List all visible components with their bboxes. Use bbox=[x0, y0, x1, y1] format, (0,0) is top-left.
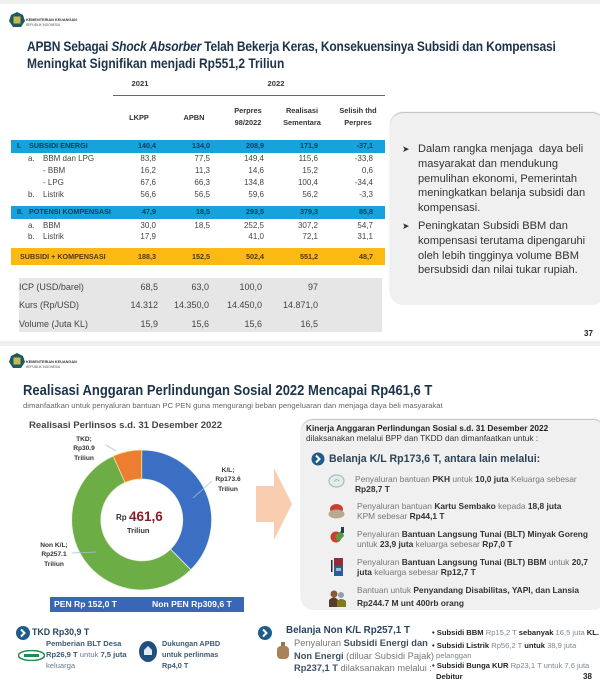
row: listrik: 56,6 bbox=[140, 190, 156, 199]
row: BBM dan LPG: a. bbox=[28, 154, 35, 163]
chart heading: Realisasi Perlinsos s.d. 31 Desember 2022 bbox=[29, 420, 222, 431]
item: dukungan APBD: Dukungan APBD bbox=[162, 639, 220, 648]
icon: chevron bullet bbox=[258, 626, 272, 640]
row: potensi kompensasi: II. bbox=[17, 207, 23, 216]
title: slide 1: APBN Sebagai Shock Absorber Telah Bekerja Keras, Konsekuensinya Subsidi dan Kompensasi bbox=[27, 38, 556, 54]
row: LPG: 66,3 bbox=[194, 178, 210, 187]
donut label: K/L: K/L; bbox=[222, 467, 234, 474]
item: PKH bbox=[355, 474, 577, 494]
row: BBM dan LPG: 115,6 bbox=[299, 154, 318, 163]
PEN bar: PEN Rp 152,0 T bbox=[54, 599, 117, 609]
row: BBM dan LPG: 83,8 bbox=[140, 154, 156, 163]
row: BBM dan LPG: BBM dan LPG bbox=[43, 154, 94, 163]
icon: dukungan APBD bbox=[139, 641, 157, 662]
row: kompensasi listrik: b. bbox=[28, 232, 35, 241]
icon: chevron bullet bbox=[16, 626, 30, 640]
row: kompensasi listrik: 17,9 bbox=[140, 232, 156, 241]
description bbox=[294, 637, 434, 674]
bullet 2: ➤ bbox=[402, 221, 410, 231]
row: BBM dan LPG: -33,8 bbox=[355, 154, 373, 163]
row: kompensasi listrik: 41,0 bbox=[248, 232, 264, 241]
icon: minyak goreng bbox=[330, 527, 344, 542]
list of subsidies: • Subsidi BBM Rp15,2 T sebanyak 16,5 juta KL. bbox=[432, 628, 599, 637]
donut label: Non K/L: Rp257.1 bbox=[41, 551, 67, 558]
column headers: Perpres bbox=[344, 118, 372, 127]
row: LPG bbox=[43, 178, 373, 187]
row: kompensasi BBM: 252,5 bbox=[244, 221, 264, 230]
row: listrik bbox=[28, 190, 373, 199]
description: Non Energi (diluar Subsidi Pajak) bbox=[294, 650, 434, 660]
panel: explanation bbox=[390, 113, 600, 305]
item: dukungan APBD bbox=[162, 639, 220, 670]
row: kompensasi listrik: Listrik bbox=[43, 232, 64, 241]
item: BBM bbox=[356, 557, 588, 577]
donut label: TKD: Triliun bbox=[74, 455, 94, 462]
row: subsidi + kompensasi bbox=[11, 248, 385, 265]
row: LPG: 67,6 bbox=[140, 178, 156, 187]
row: BBM: - BBM bbox=[43, 166, 65, 175]
bullet 2: kompensasi terutama dipengaruhi bbox=[418, 235, 585, 247]
item: disabilitas bbox=[357, 585, 580, 608]
item: BLT desa: Pemberian BLT Desa bbox=[46, 639, 121, 648]
row: volume: 15,6 bbox=[244, 319, 262, 329]
bullet 1: masyarakat dan mendukung bbox=[418, 158, 558, 170]
bullet 1: ➤ bbox=[402, 144, 410, 154]
row: kompensasi listrik: 72,1 bbox=[302, 232, 318, 241]
item: minyak goreng: Penyaluran Bantuan Langsung Tunai (BLT) Minyak Goreng bbox=[357, 529, 588, 539]
row: kurs bbox=[19, 300, 318, 310]
page number 38: 38 bbox=[583, 672, 592, 681]
row: volume: 16,5 bbox=[300, 319, 318, 329]
bullet 2: oleh lebih tingginya volume BBM bbox=[418, 250, 579, 262]
row: kompensasi BBM: 307,2 bbox=[298, 221, 318, 230]
item: minyak goreng: untuk 23,9 juta keluarga sebesar Rp7,0 T bbox=[357, 539, 513, 549]
list of subsidies bbox=[432, 627, 600, 683]
row: ICP: 100,0 bbox=[239, 282, 262, 292]
description: Penyaluran Subsidi Energi dan bbox=[294, 638, 428, 648]
row: potensi kompensasi bbox=[11, 206, 385, 219]
non K/L heading: Belanja Non K/L Rp257,1 T bbox=[286, 625, 410, 636]
row: listrik: Listrik bbox=[43, 190, 64, 199]
PEN bar bbox=[50, 597, 244, 612]
title: slide 1: Meningkat Signifikan menjadi Rp551,2 Triliun bbox=[27, 55, 284, 71]
row: BBM dan LPG: 77,5 bbox=[194, 154, 210, 163]
column headers: Sementara bbox=[283, 118, 321, 127]
TKD heading: TKD Rp30,9 T bbox=[32, 627, 89, 637]
row: potensi kompensasi: 47,9 bbox=[142, 207, 156, 216]
item: PKH: Penyaluran bantuan PKH untuk 10,0 juta Keluarga sebesar bbox=[355, 474, 577, 484]
logo: ministry of finance, slide 2 bbox=[9, 353, 77, 369]
row: subsidi energi bbox=[11, 140, 385, 153]
row: ICP: 97 bbox=[308, 282, 318, 292]
list of subsidies: Debitur bbox=[436, 672, 463, 681]
bullet 1: Dalam rangka menjaga daya beli bbox=[418, 143, 583, 155]
row: kompensasi BBM: 18,5 bbox=[194, 221, 210, 230]
list of subsidies: • Subsidi Bunga KUR Rp23,1 T untuk 7,6 juta bbox=[432, 661, 589, 670]
item: dukungan APBD: Rp4,0 T bbox=[162, 661, 188, 670]
PEN bar: Non PEN Rp309,6 T bbox=[152, 599, 232, 609]
page number 37: 37 bbox=[584, 329, 593, 338]
panel: kinerja anggaran bbox=[301, 420, 600, 610]
column headers: APBN bbox=[184, 113, 204, 122]
bullet 1 bbox=[402, 143, 585, 214]
row: listrik: 59,6 bbox=[248, 190, 264, 199]
donut label: K/L: Rp173.6 bbox=[215, 476, 241, 483]
item: BLT desa: Rp26,9 T untuk 7,5 juta bbox=[46, 650, 127, 659]
row: volume: 15,6 bbox=[191, 319, 209, 329]
row: listrik: 56,5 bbox=[194, 190, 210, 199]
row: potensi kompensasi: 379,3 bbox=[300, 207, 318, 216]
list of subsidies: pelanggan bbox=[436, 651, 471, 660]
row: BBM bbox=[43, 166, 373, 175]
logo: ministry of finance, slide 2: KEMENTERIAN KEUANGAN bbox=[26, 360, 77, 364]
row: subsidi energi: SUBSIDI ENERGI bbox=[29, 141, 88, 150]
row: potensi kompensasi: 85,8 bbox=[359, 207, 373, 216]
panel subheading: dilaksanakan melalui BPP dan TKDD dan dimanfaatkan untuk : bbox=[306, 433, 538, 443]
item: BBM: Penyaluran Bantuan Langsung Tunai (BLT) BBM untuk 20,7 bbox=[357, 557, 588, 567]
column headers: Realisasi bbox=[286, 106, 318, 115]
row: kompensasi listrik bbox=[28, 232, 373, 241]
segment: TKD bbox=[113, 450, 142, 482]
title: slide 2: Realisasi Anggaran Perlindungan Sosial 2022 Mencapai Rp461,6 T bbox=[23, 382, 432, 399]
row: ICP: 63,0 bbox=[191, 282, 209, 292]
row: BBM: 11,3 bbox=[195, 166, 210, 175]
bullet 2: Peningkatan Subsidi BBM dan bbox=[418, 220, 568, 232]
assumptions table bbox=[19, 278, 382, 332]
donut center total: Rp bbox=[116, 513, 127, 522]
row: volume: Volume (Juta KL) bbox=[19, 319, 88, 329]
row: subsidi + kompensasi: 502,4 bbox=[246, 252, 264, 261]
donut label: K/L: Triliun bbox=[218, 486, 238, 493]
row: subsidi + kompensasi: 48,7 bbox=[359, 252, 373, 261]
donut label: TKD: TKD; bbox=[76, 436, 92, 443]
row: kurs: Kurs (Rp/USD) bbox=[19, 300, 79, 310]
donut label: TKD: Rp30.9 bbox=[73, 445, 95, 452]
item: kartu sembako: KPM sebesar Rp44,1 T bbox=[357, 511, 445, 521]
row: volume bbox=[19, 319, 318, 329]
row: listrik: -3,3 bbox=[359, 190, 373, 199]
row: BBM: 0,6 bbox=[362, 166, 373, 175]
subtitle: slide 2: dimanfaatkan untuk penyaluran bantuan PC PEN guna mengurangi beban pengeluaran dan menjaga daya beli masyarakat bbox=[23, 401, 443, 410]
donut label: Non K/L: Triliun bbox=[44, 561, 64, 568]
title: slide 1 bbox=[27, 38, 556, 71]
row: kompensasi BBM: BBM bbox=[43, 221, 60, 230]
row: subsidi + kompensasi: 551,2 bbox=[300, 252, 318, 261]
row: kurs: 14.312 bbox=[130, 300, 158, 310]
row: subsidi energi: 171,9 bbox=[300, 141, 318, 150]
row: listrik: b. bbox=[28, 190, 35, 199]
bullet 1: kompensasi. bbox=[418, 202, 480, 214]
year header 2021: 2021 bbox=[132, 79, 148, 88]
row: subsidi energi: 140,4 bbox=[138, 141, 156, 150]
row: BBM dan LPG: 149,4 bbox=[244, 154, 264, 163]
budget table bbox=[11, 79, 385, 332]
icon: BBM pump bbox=[331, 558, 343, 576]
row: kompensasi BBM bbox=[28, 221, 373, 230]
row: BBM: 15,2 bbox=[302, 166, 318, 175]
column headers: Perpres bbox=[234, 106, 262, 115]
icon: PKH bbox=[328, 474, 345, 488]
row: subsidi + kompensasi: SUBSIDI + KOMPENSASI bbox=[20, 252, 106, 261]
row: kompensasi listrik: 31,1 bbox=[357, 232, 373, 241]
row: volume: 15,9 bbox=[140, 319, 158, 329]
panel heading: Kinerja Anggaran Perlindungan Sosial s.d. 31 Desember 2022 bbox=[306, 423, 548, 433]
donut label: K/L bbox=[215, 467, 241, 493]
bullet 2 bbox=[402, 220, 585, 276]
year header 2022: 2022 bbox=[268, 79, 284, 88]
row: subsidi energi: I. bbox=[17, 141, 21, 150]
icon: gas cylinder bbox=[277, 642, 289, 660]
row: LPG: 100,4 bbox=[298, 178, 318, 187]
donut label: Non K/L bbox=[40, 542, 68, 568]
row: listrik: 56,2 bbox=[302, 190, 318, 199]
row: subsidi + kompensasi: 152,5 bbox=[192, 252, 210, 261]
donut center total: 461,6 bbox=[129, 509, 163, 524]
item: BBM: juta keluarga sebesar Rp12,7 T bbox=[357, 567, 476, 577]
donut label: Non K/L: Non K/L; bbox=[40, 542, 68, 549]
column headers bbox=[129, 106, 377, 127]
arrow bbox=[256, 468, 292, 540]
item: disabilitas: Rp244.7 M unt 400rb orang bbox=[357, 598, 464, 608]
item: kartu sembako bbox=[357, 501, 562, 521]
item: BLT desa bbox=[46, 639, 127, 670]
slide divider bbox=[0, 341, 600, 346]
icon: kartu sembako bbox=[328, 504, 344, 518]
row: potensi kompensasi: 293,5 bbox=[246, 207, 264, 216]
row: ICP: ICP (USD/barel) bbox=[19, 282, 84, 292]
row: subsidi energi: 134,0 bbox=[192, 141, 210, 150]
item: disabilitas: Bantuan untuk Penyandang Disabilitas, YAPI, dan Lansia bbox=[357, 585, 579, 595]
column headers: Selisih thd bbox=[339, 106, 377, 115]
icon: chevron bullet bbox=[312, 452, 324, 466]
row: ICP: 68,5 bbox=[140, 282, 158, 292]
list of subsidies: • Subsidi Listrik Rp56,2 T untuk 38,9 juta bbox=[432, 641, 576, 650]
item: kartu sembako: Penyaluran bantuan Kartu Sembako kepada 18,8 juta bbox=[357, 501, 561, 511]
description: Rp237,1 T dilaksanakan melalui : bbox=[294, 663, 432, 673]
row: LPG: 134,8 bbox=[244, 178, 264, 187]
logo: ministry of finance, slide 1: KEMENTERIAN KEUANGAN bbox=[26, 18, 77, 22]
segment: Non K/L bbox=[72, 456, 191, 590]
logo: ministry of finance, slide 1: REPUBLIK INDONESIA bbox=[26, 23, 60, 27]
row: BBM: 14,6 bbox=[248, 166, 264, 175]
row: kompensasi BBM: 54,7 bbox=[357, 221, 373, 230]
row: subsidi energi: -37,1 bbox=[357, 141, 373, 150]
row: potensi kompensasi: POTENSI KOMPENSASI bbox=[29, 207, 111, 216]
row: LPG: - LPG bbox=[43, 178, 64, 187]
belanja K/L heading: Belanja K/L Rp173,6 T, antara lain melalui: bbox=[329, 453, 540, 465]
donut label: TKD bbox=[73, 436, 95, 462]
icon: people bbox=[329, 590, 346, 607]
segment: K/L bbox=[142, 450, 212, 570]
icon: BLT desa bbox=[18, 650, 45, 661]
item: dukungan APBD: untuk perlinmas bbox=[162, 650, 218, 659]
column headers: LKPP bbox=[129, 113, 149, 122]
row: kurs: 14.450,0 bbox=[227, 300, 262, 310]
donut chart bbox=[71, 444, 212, 590]
section: belanja non K/L bbox=[258, 625, 599, 681]
donut center total: Triliun bbox=[127, 526, 150, 535]
item: PKH: Rp28,7 T bbox=[355, 484, 390, 494]
row: subsidi energi: 208,9 bbox=[246, 141, 264, 150]
row: kurs: 14.871,0 bbox=[283, 300, 318, 310]
item: minyak goreng bbox=[357, 529, 588, 549]
row: subsidi + kompensasi: 188,3 bbox=[138, 252, 156, 261]
row: kurs: 14.350,0 bbox=[174, 300, 209, 310]
row: kompensasi BBM: 30,0 bbox=[140, 221, 156, 230]
row: potensi kompensasi: 18,5 bbox=[196, 207, 210, 216]
top strip bbox=[0, 0, 600, 4]
row: ICP bbox=[19, 282, 318, 292]
bullet 1: meningkatkan belanja subsidi dan bbox=[418, 187, 585, 199]
logo: ministry of finance, slide 1 bbox=[9, 12, 77, 27]
row: BBM dan LPG bbox=[28, 154, 373, 163]
row: BBM: 16,2 bbox=[140, 166, 156, 175]
row: LPG: -34,4 bbox=[355, 178, 373, 187]
bullet 1: pemulihan ekonomi, Pemerintah bbox=[418, 173, 577, 185]
bullet 2: bersubsidi dan nilai tukar rupiah. bbox=[418, 264, 578, 276]
logo: ministry of finance, slide 2: REPUBLIK INDONESIA bbox=[26, 365, 60, 369]
donut center total bbox=[116, 509, 163, 535]
item: BLT desa: keluarga bbox=[46, 661, 75, 670]
section: TKD bbox=[16, 626, 220, 670]
column headers: 98/2022 bbox=[235, 118, 261, 127]
row: kompensasi BBM: a. bbox=[28, 221, 35, 230]
